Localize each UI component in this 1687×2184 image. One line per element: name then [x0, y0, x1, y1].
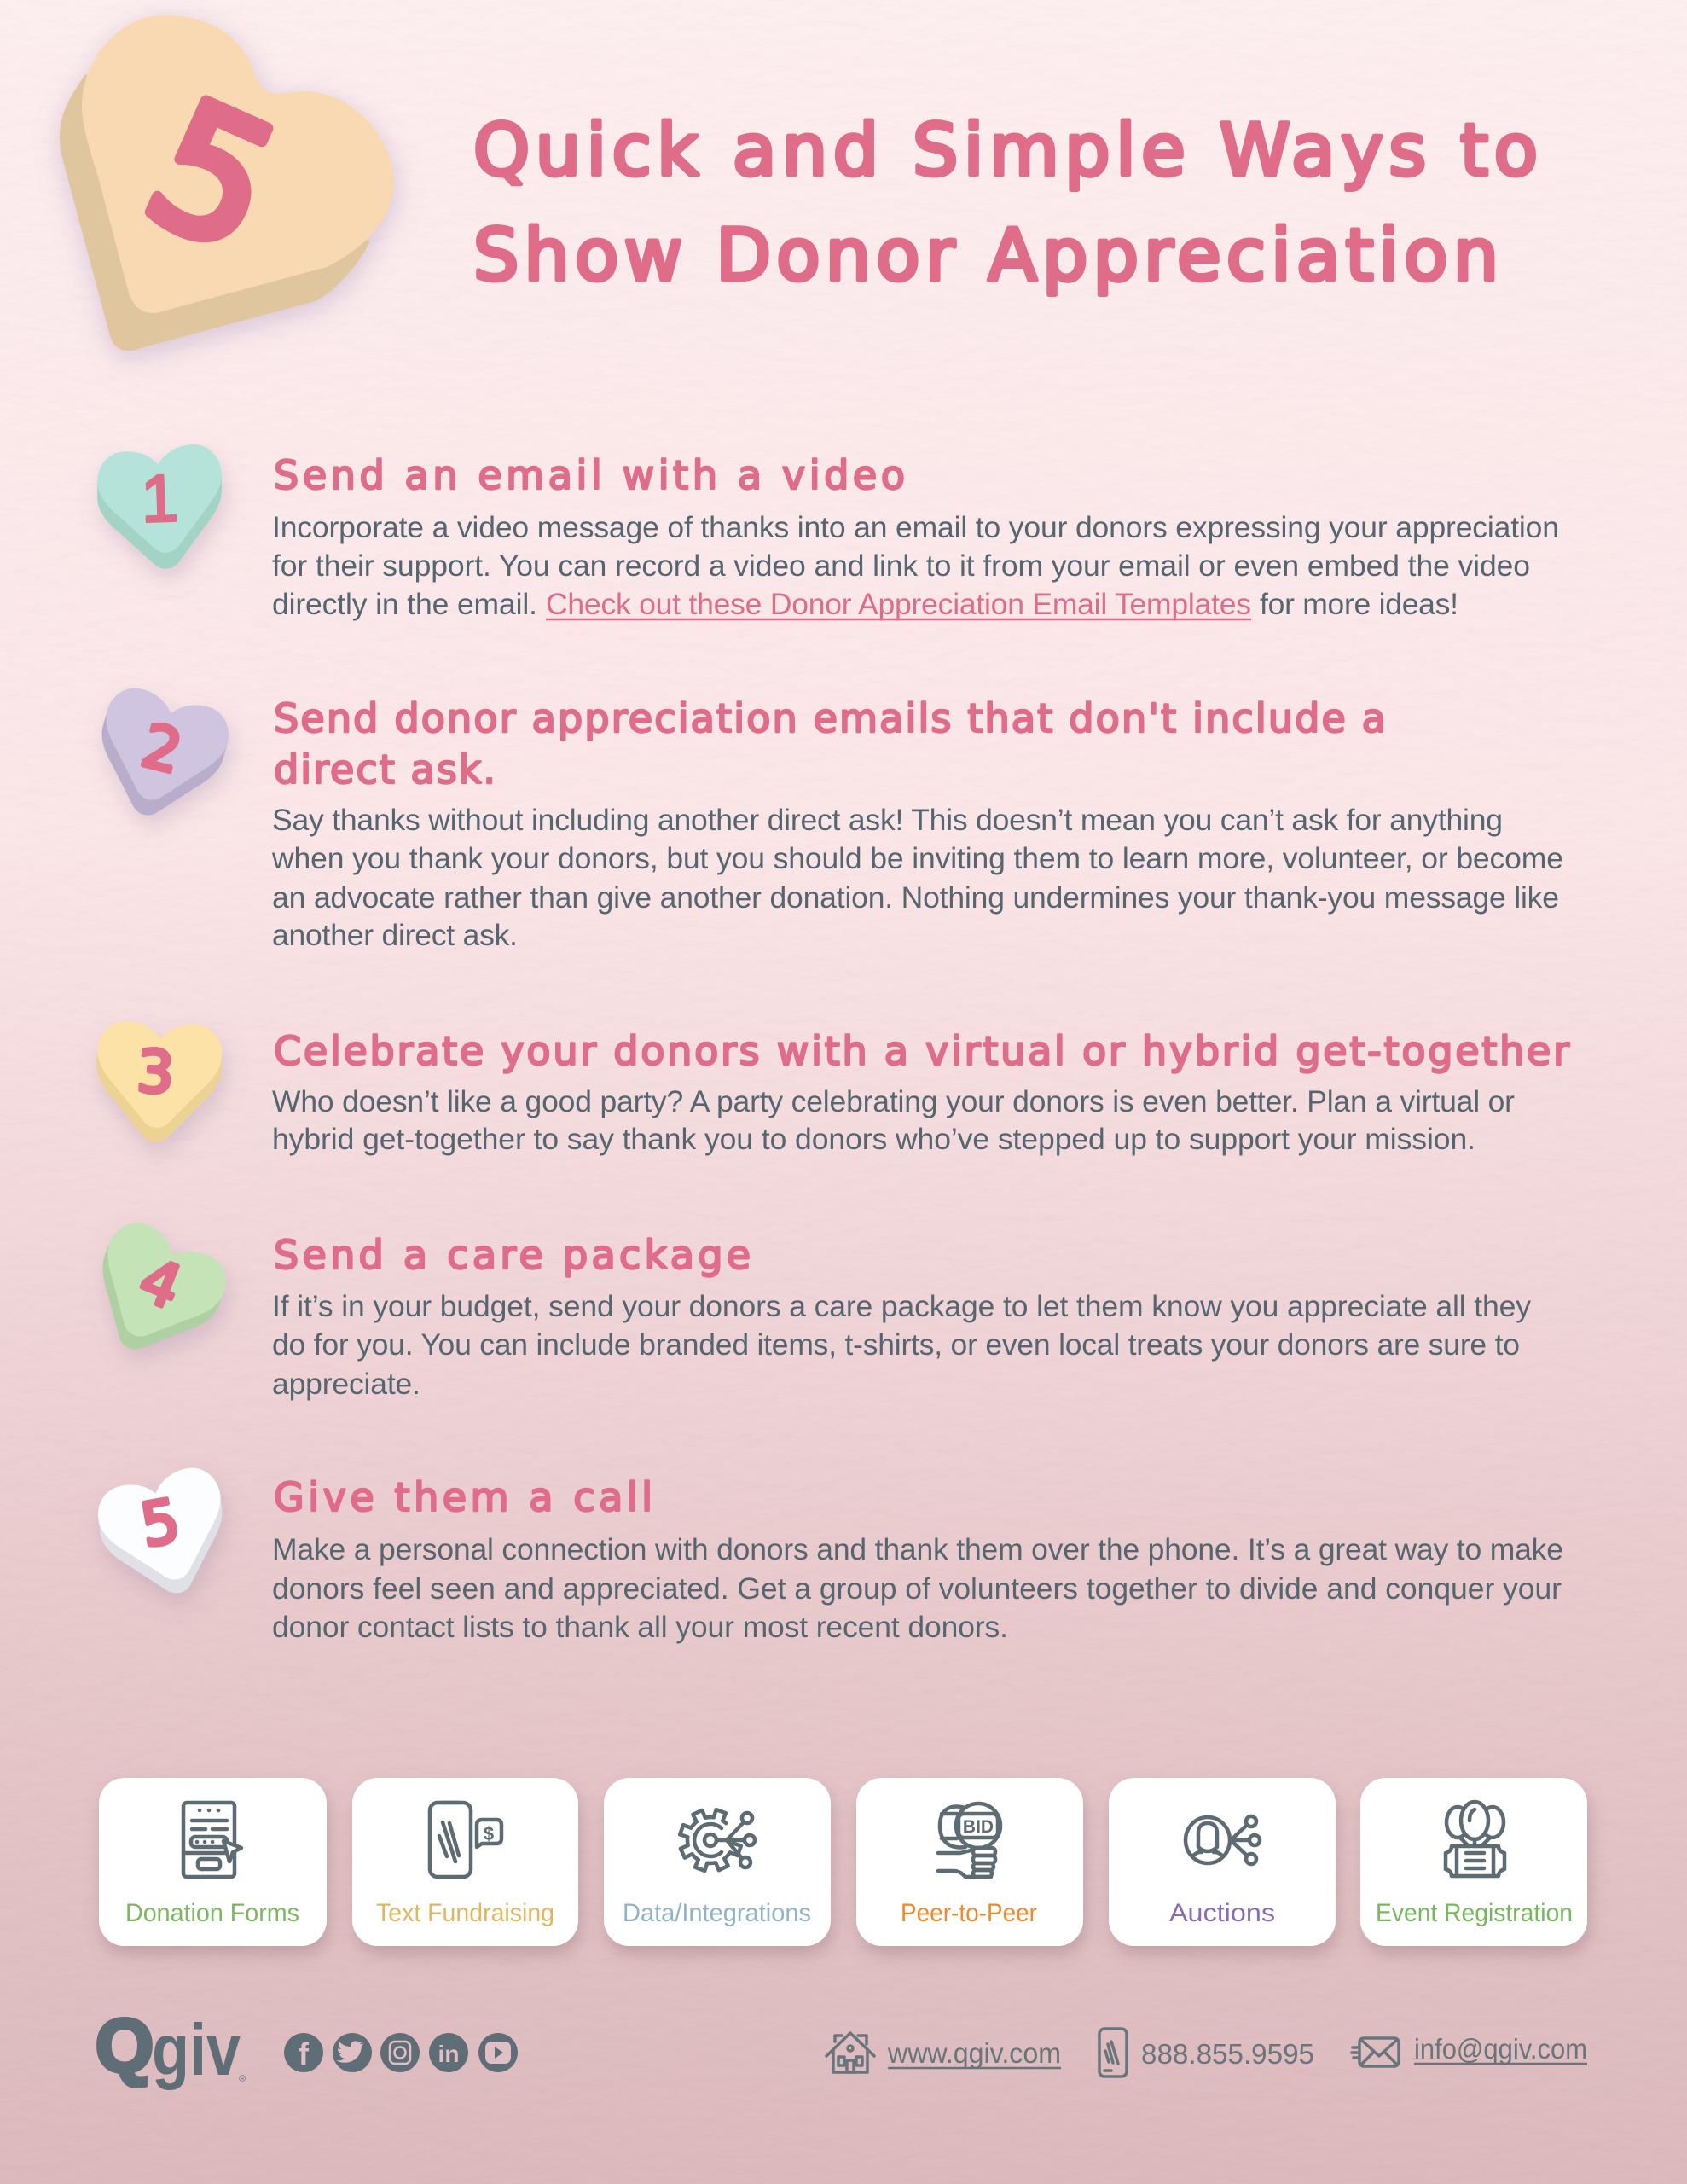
icon: yellow heart number 3	[93, 1019, 223, 1146]
contact: email	[1352, 2033, 1587, 2066]
text block: do for you. You can include branded items, t-shirts, or even local treats your donors are sure to	[272, 1327, 1520, 1362]
text block	[271, 803, 1563, 952]
text block: Who doesn’t like a good party? A party celebrating your donors is even better. Plan a virtual or	[272, 1084, 1515, 1118]
title: Show Donor Appreciation	[473, 213, 1499, 297]
text block: for their support. You can record a video and link to it from your email or even embed the video	[272, 549, 1530, 583]
heading: Send a care package	[274, 1232, 751, 1278]
icon: youtube	[478, 2033, 518, 2072]
panel: step 3	[93, 1019, 1569, 1156]
heading: Send donor appreciation emails that don't include a	[274, 695, 1386, 741]
heading: Celebrate your donors with a virtual or hybrid get-together	[274, 1028, 1569, 1074]
card: Event Registration	[1360, 1778, 1587, 1946]
icon: phone	[1099, 2029, 1127, 2077]
label: Event Registration	[1376, 1899, 1573, 1927]
title	[473, 108, 1538, 297]
text block: donors feel seen and appreciated. Get a group of volunteers together to divide and conquer your	[272, 1571, 1562, 1606]
heading: Send an email with a video	[274, 452, 905, 498]
icon: bid paddle in hand	[938, 1804, 1000, 1877]
icon: gear with nodes	[679, 1809, 755, 1872]
heading: Give them a call	[274, 1474, 652, 1520]
icon: green heart number 4	[72, 1213, 236, 1376]
icon: facebook	[284, 2033, 323, 2072]
icon: green heart number 4: 4	[130, 1244, 191, 1323]
icon: mint heart number 1: 1	[140, 460, 179, 537]
contact: website: www.qgiv.com	[887, 2037, 1061, 2069]
icon: linkedin: in	[438, 2041, 459, 2067]
label: Auctions	[1169, 1899, 1275, 1927]
icon: phone with dollar bubble: $	[484, 1823, 494, 1844]
icon: linkedin	[429, 2033, 468, 2072]
icon: yellow heart number 3: 3	[136, 1038, 176, 1107]
contact: phone	[1099, 2029, 1314, 2077]
contact: email: info@qgiv.com	[1414, 2033, 1587, 2065]
text block: Check out these Donor Appreciation Email Templates	[546, 587, 1251, 621]
panel: step 1	[95, 442, 1559, 621]
icon: envelope	[1352, 2038, 1399, 2066]
icon: large candy heart with number 5	[60, 15, 394, 351]
icon: twitter	[333, 2033, 372, 2072]
icon: donation form	[183, 1803, 241, 1877]
social icons	[284, 2033, 518, 2072]
logo: Qgiv	[96, 2003, 246, 2091]
panel: step 2	[84, 682, 1563, 952]
panel: step 4	[72, 1213, 1531, 1401]
logo: Qgiv: giv	[152, 2010, 241, 2091]
logo: Qgiv: Q	[96, 2003, 154, 2088]
heading: direct ask.	[274, 746, 496, 793]
text block: appreciate.	[272, 1367, 420, 1401]
text block	[272, 1532, 1563, 1644]
text block: hybrid get-together to say thank you to donors who’ve stepped up to support your mission.	[272, 1122, 1475, 1156]
text block: If it’s in your budget, send your donors a care package to let them know you appreciate all they	[272, 1289, 1531, 1323]
title: Quick and Simple Ways to	[473, 108, 1538, 192]
text block: another direct ask.	[272, 918, 518, 952]
text block: directly in the email.	[272, 587, 537, 621]
text block: Make a personal connection with donors and thank them over the phone. It’s a great way to make	[272, 1532, 1563, 1566]
text block: an advocate rather than give another donation. Nothing undermines your thank-you message like	[272, 880, 1559, 915]
label: Peer-to-Peer	[901, 1899, 1037, 1927]
panel: step 5	[91, 1461, 1563, 1644]
text block: Incorporate a video message of thanks into an email to your donors expressing your appreciation	[272, 510, 1559, 544]
card: Data/Integrations	[604, 1778, 831, 1946]
icon: white heart number 5	[91, 1461, 241, 1609]
icon: person with nodes	[1186, 1816, 1260, 1864]
label: Text Fundraising	[376, 1899, 554, 1927]
icon: large candy heart with number 5: 5	[119, 62, 304, 293]
text block: for more ideas!	[1260, 587, 1458, 621]
logo: Qgiv: ®	[239, 2074, 246, 2084]
label: Data/Integrations	[623, 1899, 811, 1927]
icon: instagram	[380, 2033, 420, 2072]
card: Peer-to-Peer	[856, 1778, 1083, 1946]
icon: mint heart number 1	[95, 442, 229, 575]
icon: lavender heart number 2: 2	[135, 711, 188, 787]
text block: donor contact lists to thank all your most recent donors.	[272, 1610, 1008, 1644]
card: Donation Forms	[99, 1778, 327, 1946]
icon: lavender heart number 2	[84, 682, 235, 831]
heading	[274, 695, 1386, 793]
text block	[272, 510, 1559, 621]
text block: Say thanks without including another direct ask! This doesn’t mean you can’t ask for anything	[272, 803, 1503, 837]
card: Text Fundraising	[352, 1778, 578, 1946]
contact: phone: 888.855.9595	[1141, 2038, 1314, 2070]
icon: white heart number 5: 5	[136, 1485, 185, 1561]
icon: facebook: f	[299, 2036, 310, 2071]
text block	[272, 1084, 1515, 1156]
contact: website	[826, 2033, 1061, 2072]
panel: product cards	[99, 1778, 1587, 1946]
card: Auctions	[1109, 1778, 1336, 1946]
text block	[272, 1289, 1531, 1401]
label: Donation Forms	[125, 1899, 299, 1927]
icon: balloons and ticket	[1446, 1802, 1504, 1876]
icon: bid paddle in hand: BID	[963, 1817, 994, 1837]
text block: when you thank your donors, but you should be inviting them to learn more, volunteer, or become	[271, 841, 1563, 875]
icon: phone with dollar bubble	[430, 1803, 501, 1877]
icon: house	[826, 2033, 874, 2072]
